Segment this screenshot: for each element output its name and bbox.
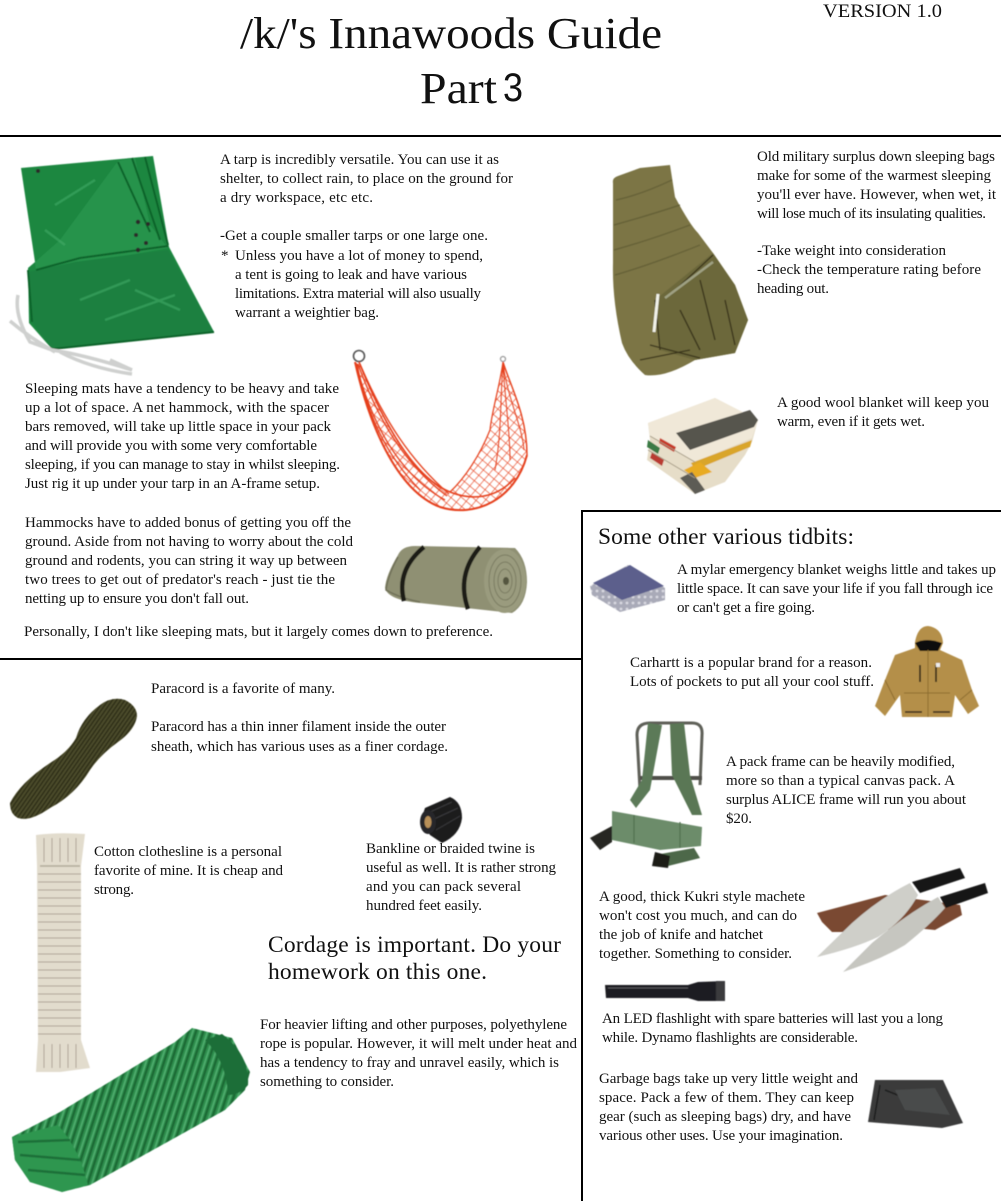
text: tarp: a tent is going to leak and have various <box>235 267 467 283</box>
icon: green polyethylene rope <box>12 1028 250 1192</box>
icon: military sleeping bag <box>613 165 748 375</box>
text: sleeping mats and hammock <box>25 381 354 607</box>
text: mylar: little space. It can save your life if you fall through ice <box>677 581 993 597</box>
text: pack frame: more so than a typical canvas pack. A <box>726 773 955 789</box>
text: mylar: A mylar emergency blanket weighs little and takes up <box>677 562 996 578</box>
text: pack frame: A pack frame can be heavily modified, <box>726 754 955 770</box>
text: sleeping mats and hammock: bars removed, will take up little space in your pack <box>25 419 332 435</box>
text: flashlight <box>602 1011 944 1046</box>
text: garbage bags: gear (such as sleeping bags) dry, and have <box>599 1109 851 1125</box>
text: clothesline <box>94 844 284 898</box>
text: clothesline: Cotton clothesline is a personal <box>94 844 282 860</box>
text: tarp: limitations. Extra material will also usually <box>235 286 482 302</box>
text: tarp: A tarp is incredibly versatile. You can use it as <box>220 152 499 168</box>
text: clothesline: favorite of mine. It is cheap and <box>94 863 284 879</box>
icon: tan Carhartt jacket <box>875 626 979 717</box>
text: tarp: a dry workspace, etc etc. <box>220 190 373 206</box>
text: sleeping bag: Old military surplus down sleeping bags <box>757 149 995 165</box>
icon: green tarp <box>10 156 214 374</box>
text: sleeping mats and hammock: Sleeping mats have a tendency to be heavy and take <box>25 381 339 397</box>
text: sleeping mats and hammock: two trees to get out of predator's reach - just tie the <box>25 572 335 588</box>
heading: cordage: Cordage is important. Do your <box>268 932 561 958</box>
text: tarp: warrant a weightier bag. <box>235 305 379 321</box>
icon: bankline spool <box>420 797 462 843</box>
text: Kukri machete: A good, thick Kukri style machete <box>599 889 805 905</box>
text: Kukri machete: together. Something to consider. <box>599 946 792 962</box>
text: sleeping bag: -Take weight into consideration <box>757 243 946 259</box>
text: paracord <box>151 681 448 755</box>
text: tarp: * <box>221 248 228 264</box>
icon: mylar blanket <box>590 565 665 612</box>
text: sleeping bag: you'll ever have. However, when wet, it <box>757 187 997 203</box>
text: wool blanket: A good wool blanket will keep you <box>777 395 990 411</box>
text: polyethylene rope: something to consider. <box>260 1074 394 1090</box>
heading: cordage <box>268 932 561 985</box>
text: sleeping bag: will lose much of its insulating qualities. <box>757 206 986 222</box>
text: garbage bags <box>599 1071 858 1144</box>
text: pack frame <box>726 754 967 827</box>
text: sleeping mats and hammock: sleeping, if you can manage to stay in whilst sleeping. <box>25 457 340 473</box>
text: tarp: shelter, to collect rain, to place on the ground for <box>220 171 513 187</box>
text: preference note: Personally, I don't like sleeping mats, but it largely comes down to preference. <box>24 624 493 640</box>
text: paracord: Paracord has a thin inner filament inside the outer <box>151 719 446 735</box>
heading: cordage: homework on this one. <box>268 959 487 985</box>
heading: tidbits: Some other various tidbits: <box>598 524 854 550</box>
text: polyethylene rope: has a tendency to fray and unravel easily, which is <box>260 1055 559 1071</box>
icon: paracord bundle <box>10 699 137 819</box>
title <box>240 9 662 113</box>
panel: other various tidbits <box>590 524 996 1144</box>
text: sleeping bag: heading out. <box>757 281 829 297</box>
icon: Kukri machetes <box>817 868 988 972</box>
text: bankline: useful as well. It is rather strong <box>366 860 556 876</box>
text: tarp: Unless you have a lot of money to spend, <box>235 248 483 264</box>
icon: garbage bags <box>868 1080 963 1128</box>
icon: cotton clothesline <box>36 833 90 1072</box>
text: pack frame: $20. <box>726 811 752 827</box>
text: sleeping mats and hammock: ground. Aside from not having to worry about the cold <box>25 534 354 550</box>
text: Kukri machete: the job of knife and hatchet <box>599 927 764 943</box>
title: 3 <box>503 66 523 110</box>
icon: folded wool blanket <box>647 398 758 494</box>
text: bankline: and you can pack several <box>366 879 521 895</box>
text: sleeping mats and hammock: netting up to ensure you don't fall out. <box>25 591 249 607</box>
text: wool blanket: warm, even if it gets wet. <box>777 414 925 430</box>
text: bankline: Bankline or braided twine is <box>366 841 535 857</box>
text: sleeping bag: -Check the temperature rating before <box>757 262 981 278</box>
text: polyethylene rope: For heavier lifting and other purposes, polyethylene <box>260 1017 567 1033</box>
icon: rolled sleeping mat <box>385 546 527 613</box>
text: sleeping bag: make for some of the warmest sleeping <box>757 168 992 184</box>
text: garbage bags: space. Pack a few of them. They can keep <box>599 1090 854 1106</box>
text: polyethylene rope <box>260 1017 578 1090</box>
text: Carhartt: Carhartt is a popular brand for a reason. <box>630 655 872 671</box>
text: Carhartt <box>630 655 874 690</box>
text: flashlight: while. Dynamo flashlights are considerable. <box>602 1030 858 1046</box>
text: wool blanket <box>777 395 990 430</box>
text: Kukri machete <box>599 889 805 962</box>
text: sleeping mats and hammock: and will provide you with some very comfortable <box>25 438 317 454</box>
text: flashlight: An LED flashlight with spare batteries will last you a long <box>602 1011 944 1027</box>
text: tarp <box>220 152 513 321</box>
icon: LED flashlight <box>605 981 725 1001</box>
version label: VERSION 1.0 <box>823 1 942 22</box>
text: polyethylene rope: rope is popular. However, it will melt under heat and <box>260 1036 578 1052</box>
text: mylar: or can't get a fire going. <box>677 600 815 616</box>
text: sleeping mats and hammock: up a lot of space. A net hammock, with the spacer <box>25 400 329 416</box>
text: clothesline: strong. <box>94 882 134 898</box>
icon: ALICE pack frame <box>590 723 702 868</box>
text: paracord: Paracord is a favorite of many. <box>151 681 335 697</box>
text: sleeping mats and hammock: ground and rodents, you can string it way up between <box>25 553 348 569</box>
text: sleeping bag <box>757 149 997 297</box>
text: sleeping mats and hammock: Hammocks have to added bonus of getting you off the <box>25 515 351 531</box>
text: bankline <box>366 841 556 914</box>
text: sleeping mats and hammock: Just rig it up under your tarp in an A-frame setup. <box>25 476 320 492</box>
panel: shelter and sleeping <box>10 149 997 640</box>
text: garbage bags: Garbage bags take up very little weight and <box>599 1071 858 1087</box>
title: Part <box>420 64 497 113</box>
title: /k/'s Innawoods Guide <box>240 9 662 58</box>
text: Kukri machete: won't cost you much, and can do <box>599 908 797 924</box>
icon: red net hammock <box>354 350 527 510</box>
text: Carhartt: Lots of pockets to put all your cool stuff. <box>630 674 874 690</box>
text: tarp: -Get a couple smaller tarps or one large one. <box>220 228 488 244</box>
text: paracord: sheath, which has various uses as a finer cordage. <box>151 739 448 755</box>
panel: cordage <box>10 681 578 1192</box>
text: garbage bags: various other uses. Use your imagination. <box>599 1128 843 1144</box>
text: mylar <box>677 562 996 616</box>
text: pack frame: surplus ALICE frame will run you about <box>726 792 967 808</box>
text: bankline: hundred feet easily. <box>366 898 482 914</box>
